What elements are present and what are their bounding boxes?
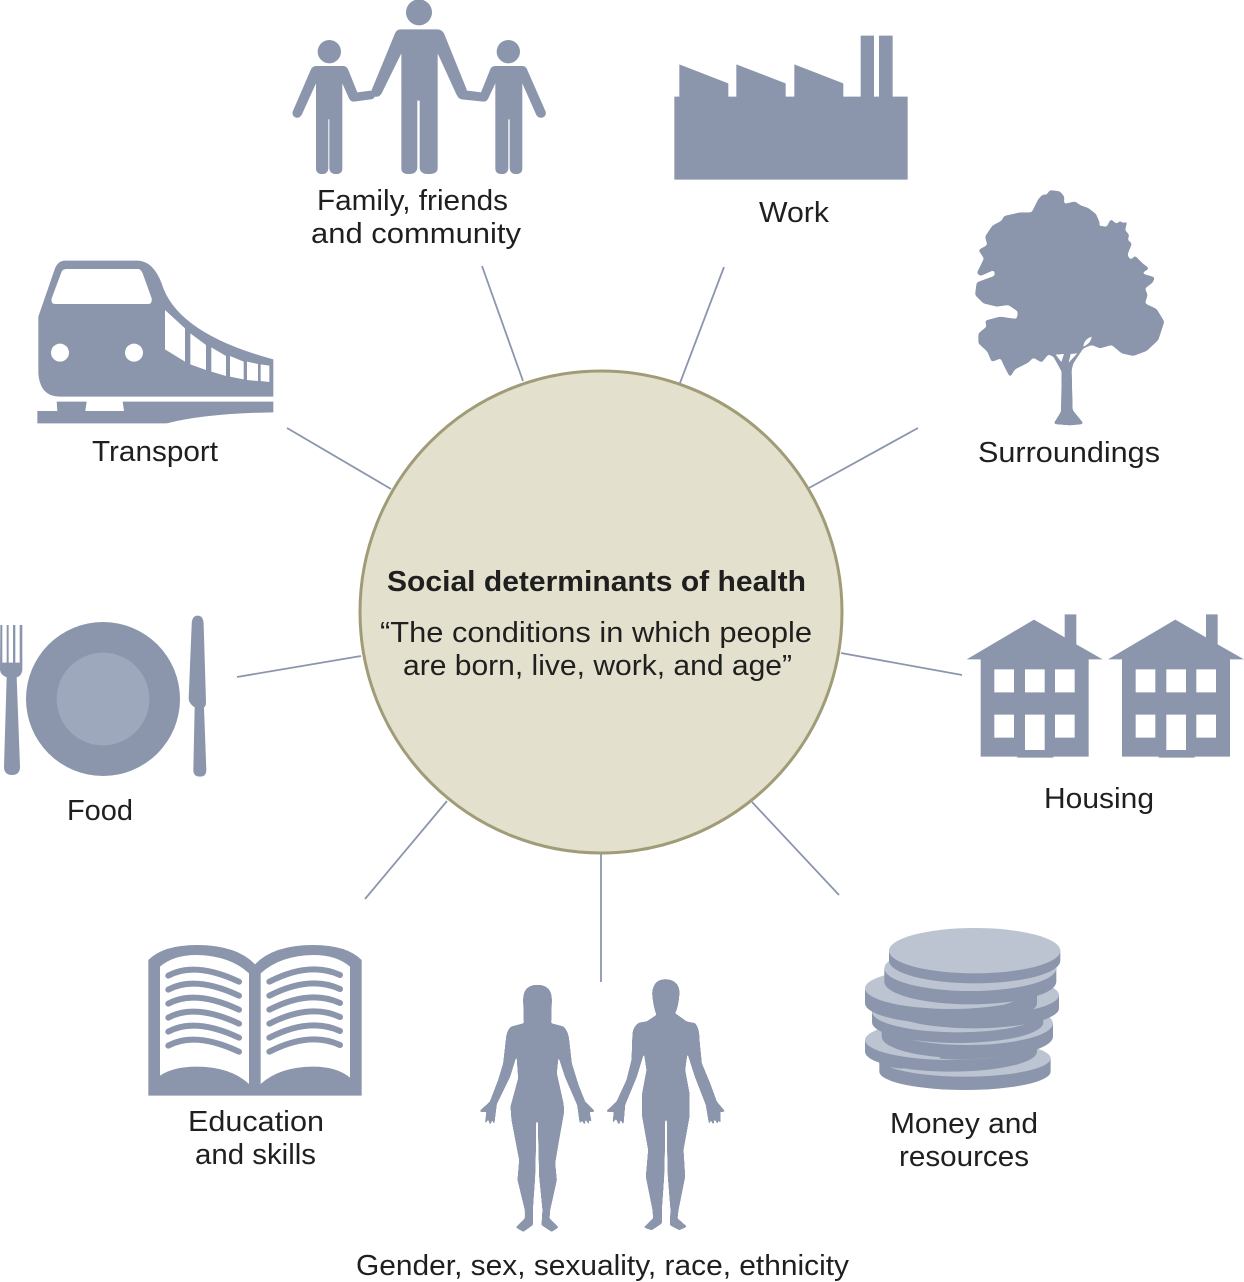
text block: definition <box>380 617 812 682</box>
icon: factory <box>674 36 908 180</box>
panel: education and skills <box>148 945 362 1171</box>
label: money and resources: Money and <box>890 1108 1038 1140</box>
label: family, friends and community: Family, friends <box>317 185 508 217</box>
icon: family holding hands <box>292 0 546 174</box>
panel: transport <box>37 261 273 468</box>
label: money and resources <box>890 1108 1038 1173</box>
label: education and skills <box>188 1106 324 1171</box>
spokes connecting the central circle to each determinant <box>237 266 962 982</box>
label: education and skills: Education <box>188 1106 324 1138</box>
panel: housing <box>967 614 1244 815</box>
panel: work <box>674 36 908 229</box>
icon: fork <box>0 625 22 775</box>
label: surroundings: Surroundings <box>978 437 1160 469</box>
icon: plate and cutlery <box>0 616 206 777</box>
panel: food <box>0 616 206 827</box>
icon: male figure <box>606 979 725 1230</box>
icon: plate <box>26 622 180 776</box>
panel: money and resources <box>865 928 1060 1173</box>
icon: knife <box>189 616 206 777</box>
text block: definition: “The conditions in which people <box>380 617 812 649</box>
icon: open book <box>148 945 362 1096</box>
icon: female figure <box>479 985 595 1232</box>
icon: human figures <box>479 979 725 1232</box>
label: gender, sex, sexuality, race, ethnicity: Gender, sex, sexuality, race, ethnicity <box>356 1250 850 1282</box>
icon: coin stack <box>865 928 1060 1090</box>
label: housing: Housing <box>1044 783 1154 815</box>
label: family, friends and community: and community <box>311 218 522 250</box>
label: education and skills: and skills <box>195 1139 316 1171</box>
label: food: Food <box>67 795 133 827</box>
label: work: Work <box>759 197 830 229</box>
panel: central circle <box>360 371 842 853</box>
text block: definition: are born, live, work, and age” <box>403 650 792 682</box>
icon: train <box>37 261 273 423</box>
heading: social determinants of health: Social determinants of health <box>387 566 806 598</box>
label: money and resources: resources <box>899 1141 1029 1173</box>
icon: left house <box>967 614 1103 758</box>
panel: gender, sex, sexuality, race, ethnicity <box>356 979 850 1282</box>
icon: two houses <box>967 614 1244 758</box>
panel: family, friends and community <box>292 0 546 250</box>
label: family, friends and community <box>311 185 522 250</box>
panel: surroundings <box>975 190 1164 469</box>
icon: tree <box>975 190 1164 425</box>
icon: right house <box>1108 614 1244 758</box>
label: transport: Transport <box>92 436 218 468</box>
